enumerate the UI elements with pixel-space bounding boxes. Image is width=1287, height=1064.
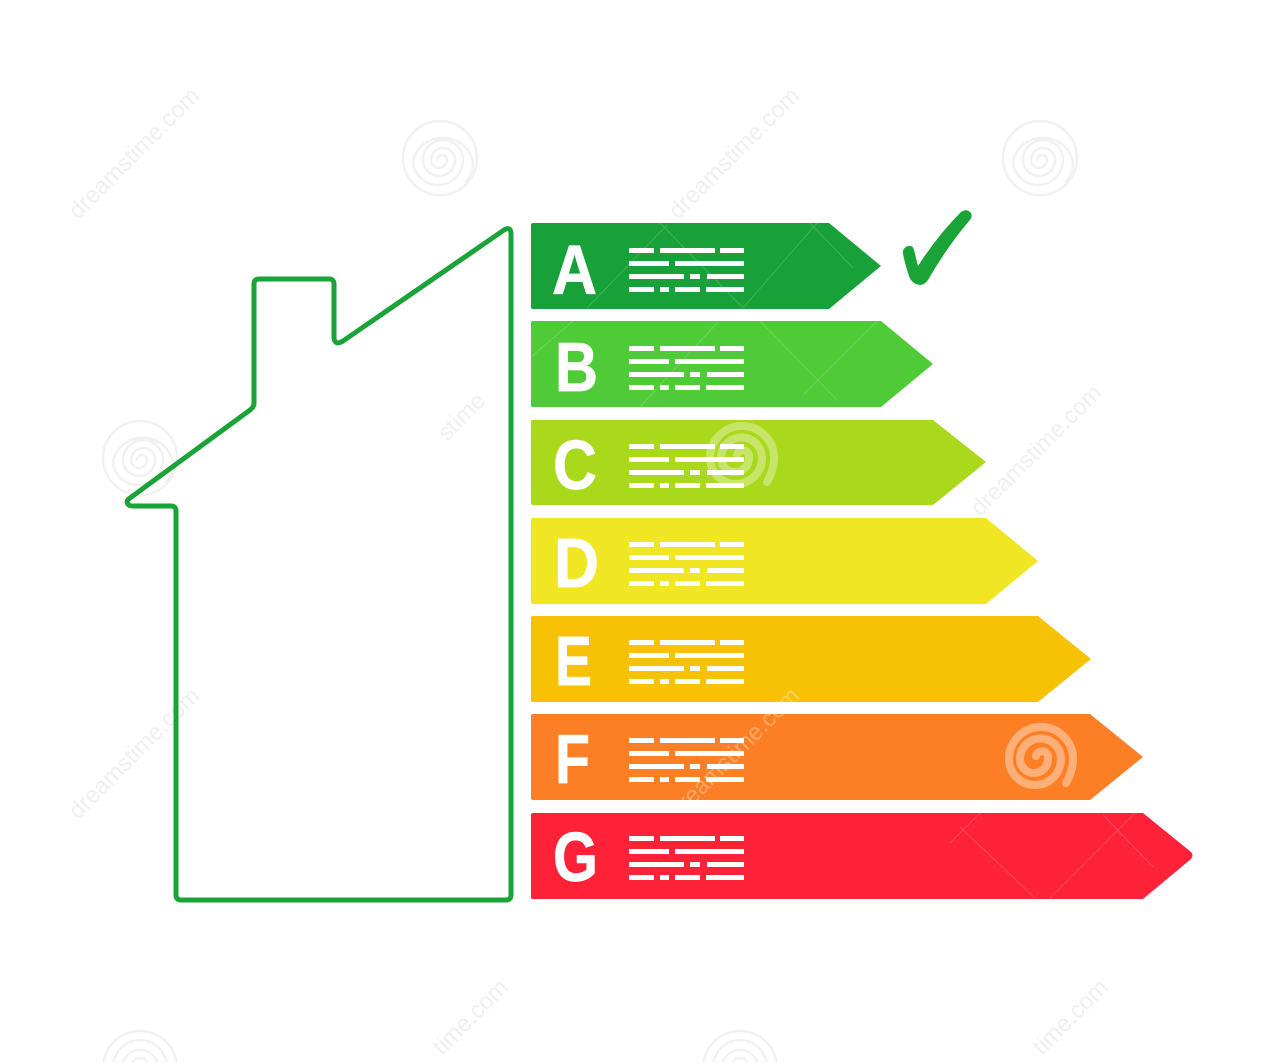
check mark [903, 210, 972, 285]
rating bar B [531, 321, 933, 407]
watermark spirals on white [103, 121, 1077, 1062]
house outline [127, 229, 511, 900]
text lines A [629, 250, 744, 290]
watermark text: dreamstime.com [63, 682, 204, 824]
rating bar A [531, 223, 881, 309]
letter E: E [555, 622, 592, 700]
rating bar E [531, 616, 1091, 702]
letter G: G [553, 818, 598, 896]
watermark text: dreamstime.com [965, 379, 1106, 521]
letter A: A [552, 231, 597, 309]
watermark spiral on C [710, 426, 774, 484]
watermark text: time.com [1027, 974, 1113, 1060]
letter D: D [554, 524, 599, 602]
watermark text [63, 82, 1113, 1060]
letter F: F [555, 720, 590, 798]
text lines G [629, 838, 744, 878]
letter B: B [555, 328, 598, 406]
rating bar F [531, 714, 1143, 800]
watermark lattice lines over bars [531, 223, 1153, 898]
watermark text: time.com [427, 974, 513, 1060]
text lines F [629, 740, 744, 780]
watermark spiral on F [1009, 727, 1073, 785]
letter C: C [553, 426, 597, 504]
text lines C [629, 446, 744, 486]
rating bar G [531, 813, 1192, 899]
text lines D [629, 544, 744, 584]
watermark text: dreamstime.com [663, 82, 804, 224]
rating bar D [531, 518, 1038, 604]
watermark text: stime [432, 387, 490, 446]
rating bar C [531, 420, 986, 505]
text lines E [629, 642, 744, 682]
watermark text: dreamstime.com [63, 82, 204, 224]
text lines B [629, 348, 744, 388]
watermark text on F: dreamstime.com [663, 682, 804, 824]
